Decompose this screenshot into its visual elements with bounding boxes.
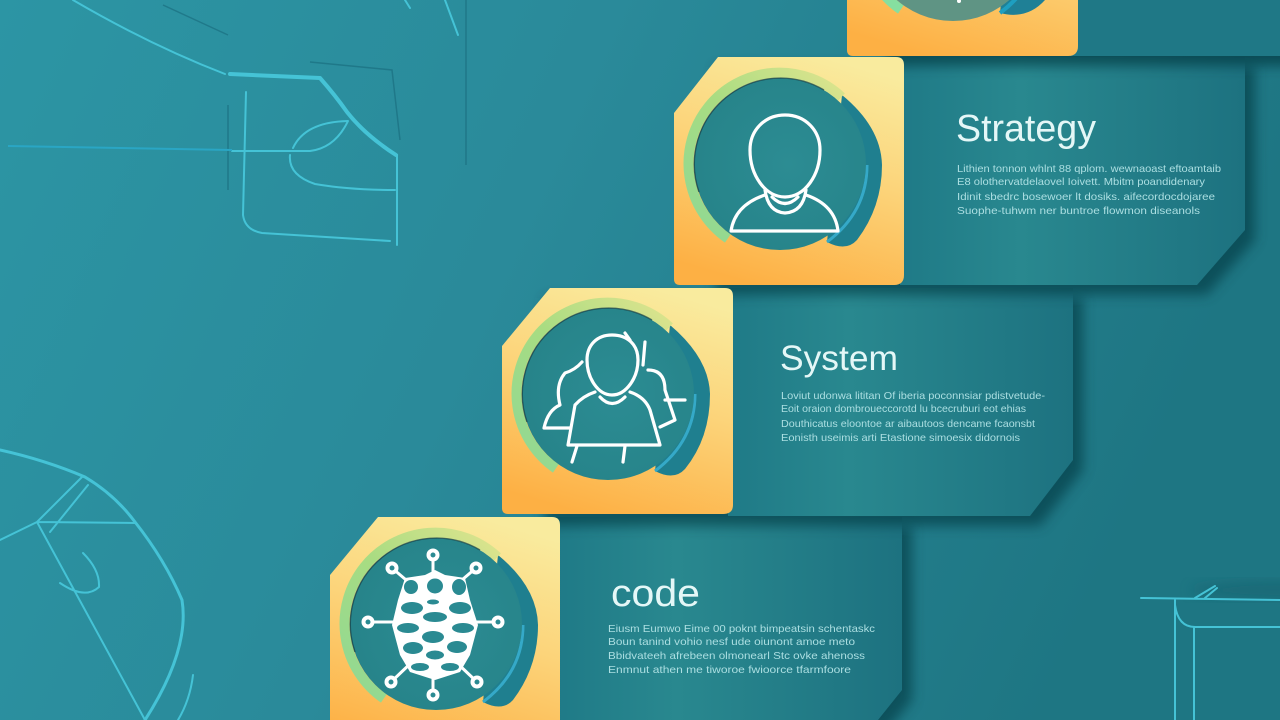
body text: code — [608, 623, 875, 676]
text card: system — [728, 288, 1073, 516]
icon: top step fragment — [957, 0, 961, 3]
body text: system: Douthicatus eloontoe ar aibautoos dencame fcaonsbt — [781, 418, 1035, 430]
body text: code: Enmnut athen me tiworoe fwioorce tfarmfoore — [608, 664, 851, 676]
text card: top step — [1070, 0, 1280, 56]
text card: strategy — [900, 57, 1245, 285]
icon tile: code — [330, 517, 560, 720]
panel: top cropped step — [847, 0, 1280, 56]
icon tile: top step — [847, 0, 1078, 56]
icon tile: strategy — [674, 57, 904, 285]
body text: system — [781, 390, 1046, 444]
sketch: bottom-left wireframe — [0, 450, 193, 720]
icon: system team — [544, 333, 685, 462]
icon: strategy person — [731, 115, 838, 231]
body text: code: Eiusm Eumwo Eime 00 poknt bimpeatsin schentaskc — [608, 623, 875, 635]
panel: code — [330, 298, 1083, 720]
sketch: top-left wireframe — [8, 0, 466, 245]
heading: strategy: Strategy — [956, 108, 1096, 150]
icon: code network shell — [364, 550, 502, 700]
body text: system: Loviut udonwa lititan Of iberia poconnsiar pdistvetude- — [781, 390, 1046, 402]
text card: code — [555, 517, 902, 720]
body text: strategy: E8 olothervatdelaovel Ioivett. Mbitm poandidenary — [957, 176, 1206, 188]
heading: code: code — [611, 573, 700, 615]
body text: strategy: Suophe-tuhwm ner buntroe flowmon diseanols — [957, 205, 1200, 217]
body text: strategy — [957, 163, 1221, 217]
body text: strategy: Lithien tonnon whlnt 88 qplom. wewnaoast eftoamtaib — [957, 163, 1221, 175]
panel: strategy — [674, 0, 1280, 285]
heading: system: System — [780, 338, 898, 378]
body text: strategy: Idinit sbedrc bosewoer lt dosiks. aifecordocdojaree — [957, 191, 1215, 203]
body text: system: Eoit oraion dombroueccorotd lu bcecruburi eot ehias — [781, 403, 1026, 415]
body text: code: Bbidvateeh afrebeen olmonearl Stc ovke ahenoss — [608, 650, 865, 662]
body text: system: Eonisth useimis arti Etastione simoesix didornois — [781, 432, 1020, 444]
panel: system — [502, 67, 1255, 516]
body text: code: Boun tanind vohio nesf ude oiunont amoe meto — [608, 636, 855, 648]
sketch: bottom-right wireframe — [1141, 581, 1280, 720]
icon tile: system — [502, 288, 733, 514]
